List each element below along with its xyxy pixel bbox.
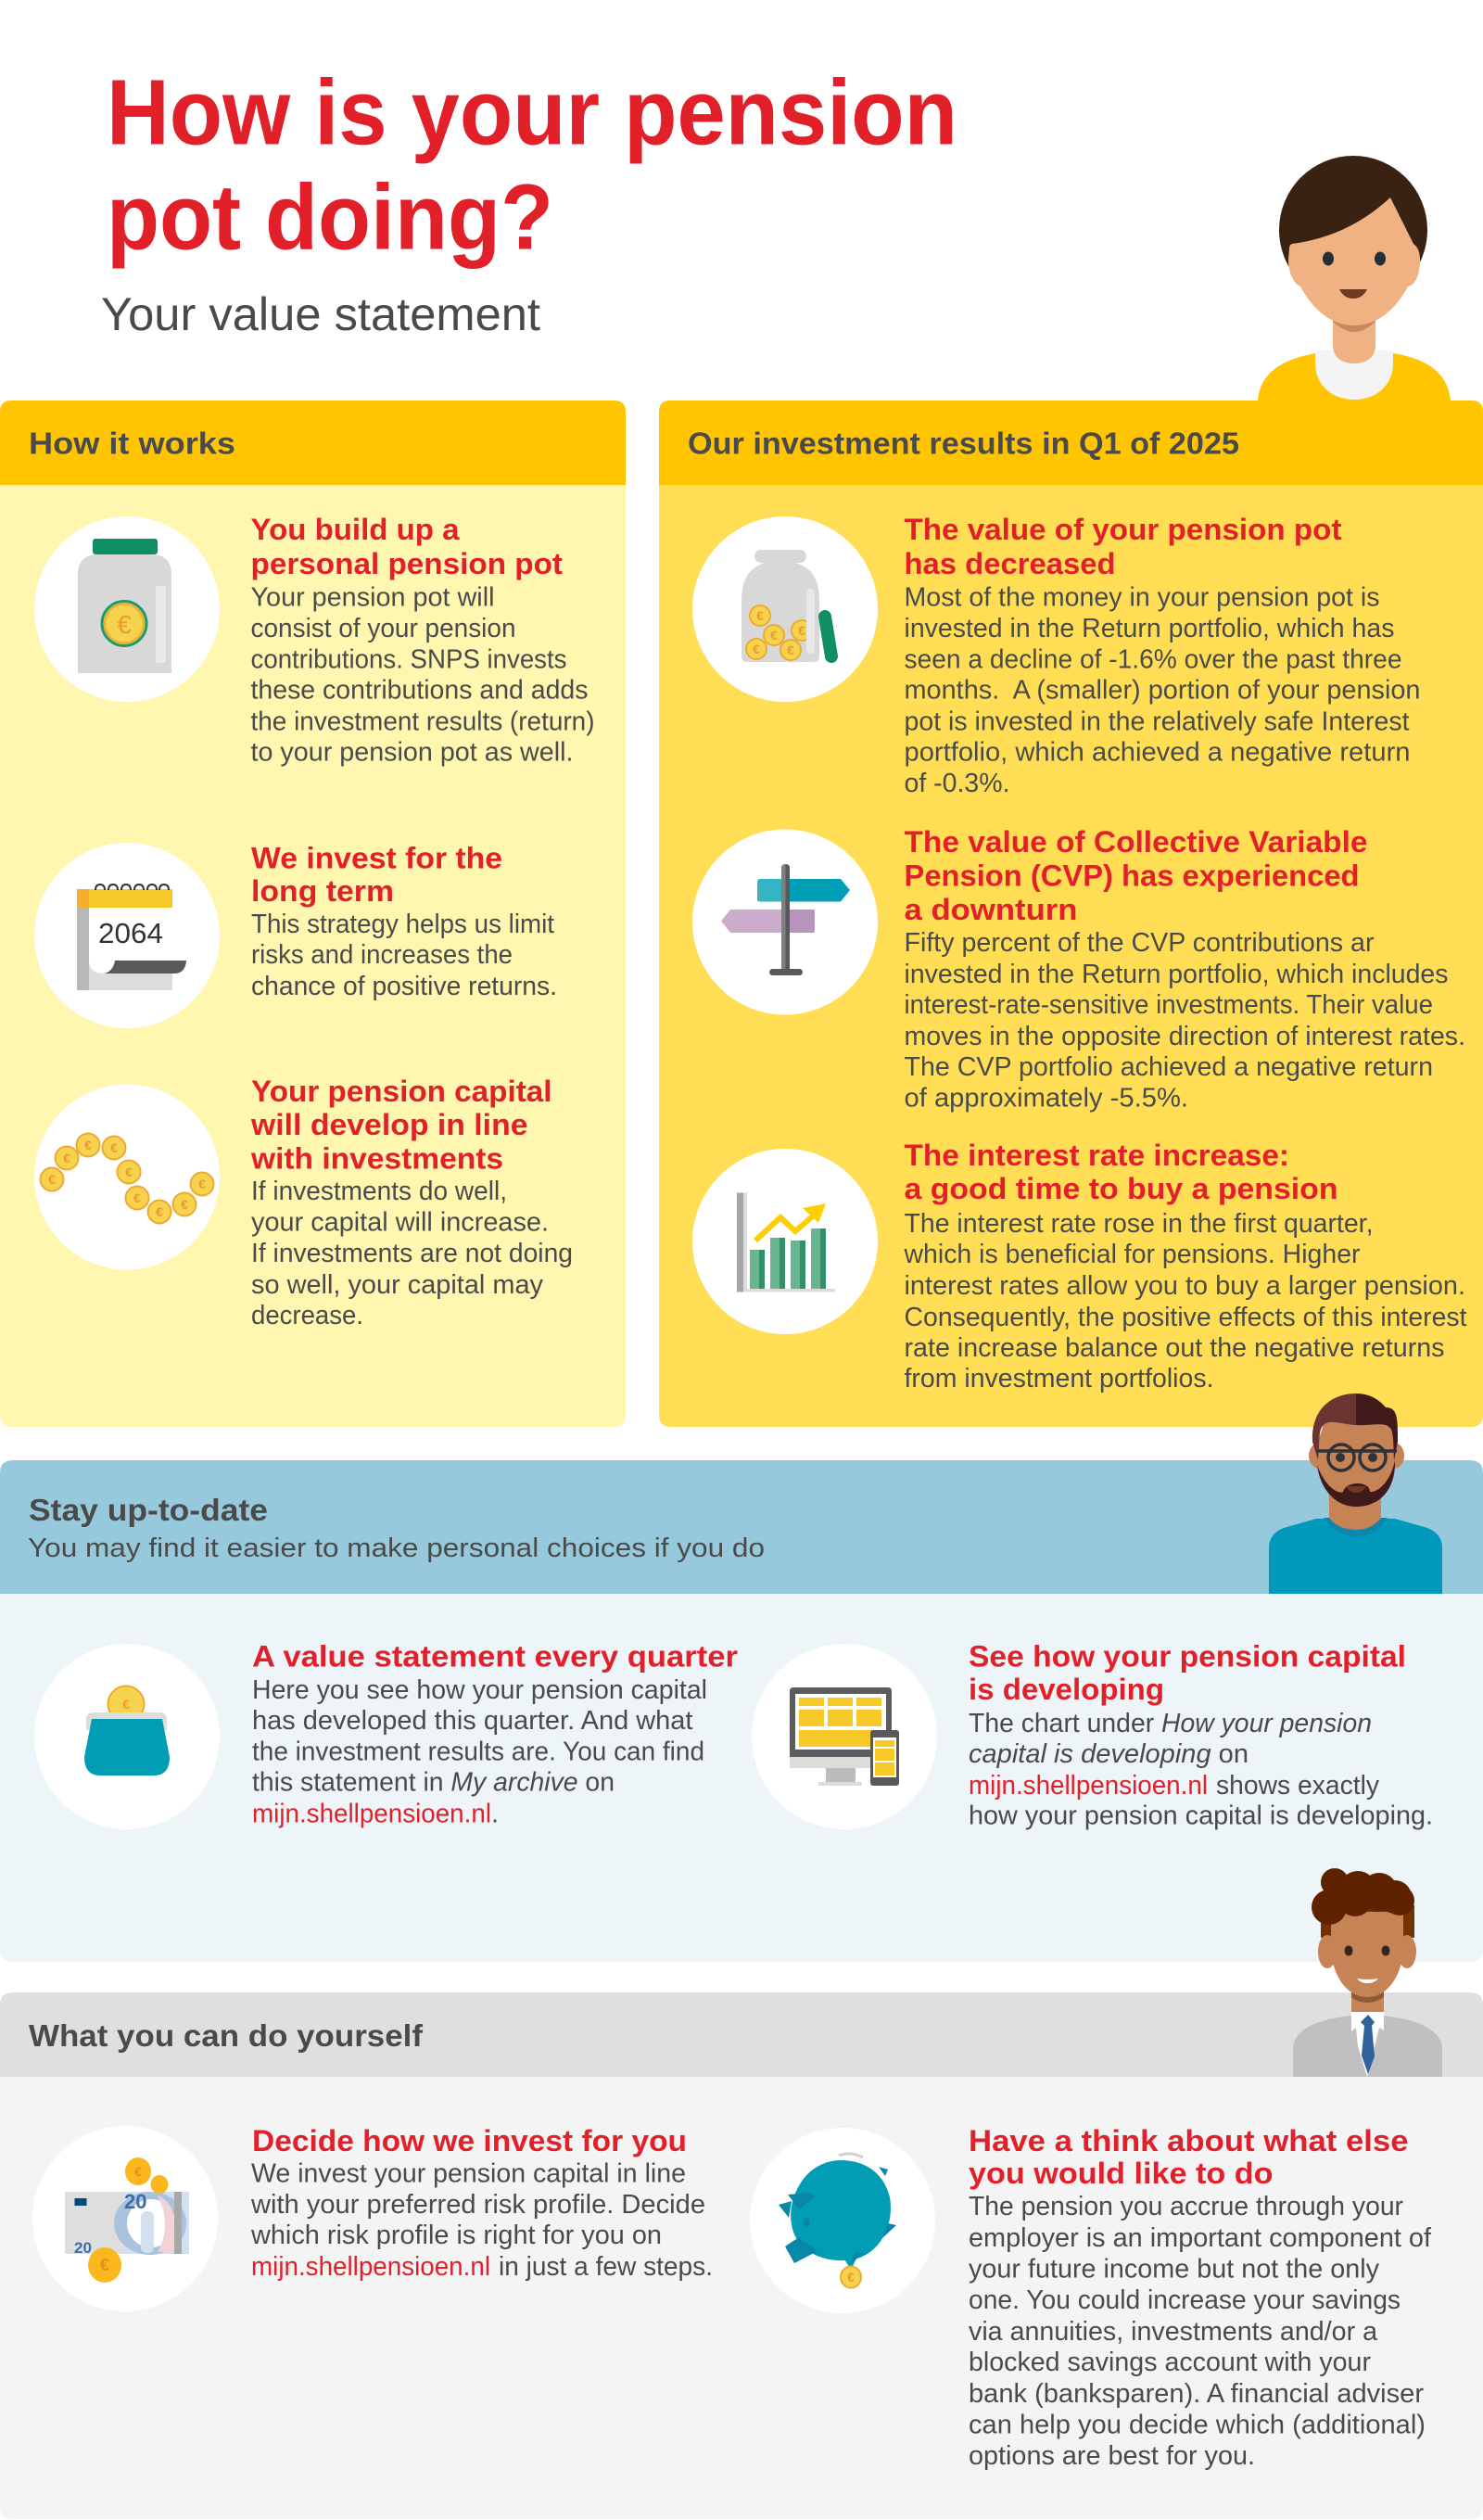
text: we invest for the long term: long term [251,874,394,908]
icon: wave of coins: € [84,1138,92,1152]
icon: open jar with coins: € [753,642,760,656]
text: see how your pension capital is developing: See how your pension capital [969,1639,1406,1673]
text: a value statement every quarter: this statement in My archive on [252,1767,615,1797]
icon: wave of coins: € [156,1204,163,1219]
text: collective variable pension downturn: of approximately -5.5%. [905,1083,1188,1113]
text: your pension capital will develop: so well, your capital may [251,1270,543,1300]
text: have a think about what else: options are best for you. [969,2441,1255,2471]
title: pot doing? [107,166,553,270]
text: decide how we invest for you [250,2124,713,2282]
text: your pension capital will develop: your capital will increase. [251,1207,549,1237]
text: have a think about what else: Have a think about what else [969,2124,1409,2157]
subheading: You may find it easier to make personal choices if you do [28,1534,765,1563]
heading: investment results: Our investment results in Q1 of 2025 [688,426,1239,460]
icon: piggy bank with coin: € [847,2270,855,2285]
icon: calendar 2064 [34,843,220,1028]
icon: jar with coin: € [117,610,132,639]
text: see how your pension capital is developing: shows exactly [1216,1771,1379,1801]
text: see how your pension capital is developing: The chart under How your pension [969,1709,1372,1738]
text: value of pension pot decreased: pot is invested in the relatively safe Interest [905,706,1409,736]
text: a value statement every quarter: . [491,1799,499,1828]
text: interest rate increase: The interest rate rose in the first quarter, [905,1209,1374,1239]
text: value of pension pot decreased: invested in the Return portfolio, which has [905,614,1394,643]
text: your pension capital will develop: If investments do well, [251,1177,507,1206]
icon: piggy bank with coin [750,2128,935,2313]
text: we invest for the long term: We invest for the [251,842,502,875]
icon: open jar with coins: € [798,623,805,638]
text: we invest for the long term: risks and increases the [251,940,513,970]
text: have a think about what else: you would like to do [969,2157,1274,2190]
text: collective variable pension downturn: The CVP portfolio achieved a negative return [905,1052,1433,1082]
text: collective variable pension downturn: a downturn [905,893,1077,926]
text: have a think about what else: your future income but not the only [969,2255,1379,2285]
text: see how your pension capital is developing: is developing [969,1673,1164,1706]
icon: purse with coin [34,1644,220,1829]
icon: desktop and phone [752,1644,937,1829]
title: How is your pension [107,61,957,165]
text: decide how we invest for you: which risk profile is right for you on [250,2221,662,2250]
text: interest rate increase: rate increase balance out the negative returns [905,1333,1444,1363]
icon: open jar with coins: € [787,643,794,657]
text: have a think about what else: one. You could increase your savings [969,2285,1401,2315]
text: see how your pension capital is developing: capital is developing on [969,1739,1249,1769]
icon: wave of coins: € [63,1151,70,1165]
text: value of pension pot decreased: The value of your pension pot [905,513,1342,546]
text: decide how we invest for you: mijn.shellpensioen.nl [251,2252,490,2282]
icon: wave of coins: € [48,1172,56,1187]
title [107,61,957,270]
icon: open jar with coins: € [756,608,764,623]
text: interest rate increase: from investment portfolios. [905,1364,1214,1394]
text: interest rate increase: which is beneficial for pensions. Higher [904,1240,1361,1269]
text: collective variable pension downturn: Pension (CVP) has experienced [905,859,1359,892]
text: a value statement every quarter: the investment results are. You can find [252,1737,704,1767]
text: you build up a personal pension pot: to your pension pot as well. [250,738,573,768]
text: your pension capital will develop [250,1075,573,1330]
text: your pension capital will develop: decrease. [251,1301,363,1330]
icon: banknote and coins: € [100,2256,109,2274]
icon: wave of coins: € [125,1165,133,1179]
text: interest rate increase [904,1139,1466,1394]
text: value of pension pot decreased: of -0.3%. [905,769,1010,798]
text: value of pension pot decreased: has decreased [905,547,1116,580]
text: collective variable pension downturn [905,825,1465,1113]
text: you build up a personal pension pot: the investment results (return) [250,706,595,736]
character: man with glasses and beard [1269,1394,1442,1594]
heading: what you can do yourself: What you can do yourself [29,2018,424,2053]
text: interest rate increase: a good time to buy a pension [905,1172,1338,1205]
text: a value statement every quarter [252,1639,738,1828]
icon: wave of coins: € [133,1190,141,1205]
text: a value statement every quarter: mijn.shellpensioen.nl [252,1799,491,1828]
panel: stay up-to-date [0,1460,1483,1962]
icon: banknote and coins: 20 [74,2239,92,2257]
panel: what you can do yourself [0,1992,1483,2519]
text: you build up a personal pension pot: personal pension pot [250,547,563,580]
text: interest rate increase: interest rates allow you to buy a larger pension. [905,1271,1465,1301]
icon: jar with coin [34,516,220,702]
icon: signpost [692,829,878,1014]
text: interest rate increase: Consequently, the positive effects of this interest [905,1303,1466,1332]
icon: banknote and coins [32,2126,218,2311]
text: collective variable pension downturn: The value of Collective Variable [905,825,1368,859]
text: collective variable pension downturn: interest-rate-sensitive investments. Their value [905,990,1433,1020]
panel: investment results [659,401,1483,1427]
text: collective variable pension downturn: invested in the Return portfolio, which includes [905,960,1448,989]
icon: wave of coins [34,1085,220,1270]
text: a value statement every quarter: Here you see how your pension capital [252,1675,707,1705]
text: your pension capital will develop: will develop in line [250,1108,528,1141]
icon: banknote and coins: 20 [124,2190,146,2213]
text: you build up a personal pension pot: consist of your pension [250,614,515,643]
text: value of pension pot decreased [905,513,1420,798]
text: value of pension pot decreased: portfolio, which achieved a negative return [905,738,1411,768]
subtitle: Your value statement [101,288,540,340]
text: value of pension pot decreased: Most of the money in your pension pot is [905,582,1379,612]
text: collective variable pension downturn: Fifty percent of the CVP contributions ar [905,928,1375,958]
text: a value statement every quarter: A value statement every quarter [252,1639,738,1673]
icon: open jar with coins [692,516,878,702]
icon: wave of coins: € [110,1140,118,1155]
icon: banknote and coins: € [134,2164,142,2179]
icon: rising bar chart [692,1149,878,1334]
text: decide how we invest for you: with your preferred risk profile. Decide [250,2190,705,2220]
text: your pension capital will develop: with investments [250,1142,503,1176]
text: we invest for the long term: This strategy helps us limit [251,910,554,939]
text: collective variable pension downturn: moves in the opposite direction of interest rates. [905,1022,1465,1051]
text: your pension capital will develop: If investments are not doing [251,1239,573,1268]
text: decide how we invest for you: in just a few steps. [499,2252,713,2282]
text: interest rate increase: The interest rate increase: [905,1139,1289,1172]
heading: how it works: How it works [29,426,235,460]
icon: wave of coins: € [181,1197,188,1212]
text: you build up a personal pension pot: these contributions and adds [250,675,588,705]
text: we invest for the long term [251,842,557,1001]
text: decide how we invest for you: Decide how we invest for you [252,2124,687,2157]
text: have a think about what else [969,2124,1432,2471]
panel: how it works [0,401,626,1427]
text: decide how we invest for you: We invest your pension capital in line [251,2158,686,2188]
text: have a think about what else: bank (banksparen). A financial adviser [969,2379,1424,2409]
text: value of pension pot decreased: months. A (smaller) portion of your pension [905,675,1420,705]
text: see how your pension capital is developing: mijn.shellpensioen.nl [969,1771,1208,1801]
text: have a think about what else: can help you decide which (additional) [969,2411,1426,2440]
text: you build up a personal pension pot: contributions. SNPS invests [250,645,567,675]
character: woman in yellow [1258,156,1451,401]
text: have a think about what else: The pension you accrue through your [969,2192,1403,2221]
icon: calendar 2064: 2064 [98,917,163,949]
icon: open jar with coins: € [770,628,778,643]
icon: wave of coins: € [198,1177,206,1191]
text: we invest for the long term: chance of positive returns. [251,972,557,1001]
text: have a think about what else: employer is an important component of [969,2223,1432,2253]
character: man in grey suit [1293,1868,1442,2077]
text: you build up a personal pension pot [250,513,595,768]
text: value of pension pot decreased: seen a decline of -1.6% over the past three [905,645,1401,675]
text: a value statement every quarter: has developed this quarter. And what [252,1706,693,1736]
text: see how your pension capital is developing [969,1639,1433,1830]
text: have a think about what else: via annuities, investments and/or a [969,2317,1378,2347]
text: you build up a personal pension pot: You build up a [250,513,460,546]
text: see how your pension capital is developing: how your pension capital is developing. [969,1801,1433,1830]
text: your pension capital will develop: Your pension capital [251,1075,552,1108]
icon: purse with coin: € [122,1697,130,1712]
text: you build up a personal pension pot: Your pension pot will [250,582,495,612]
text: have a think about what else: blocked savings account with your [969,2348,1371,2377]
heading: stay up-to-date: Stay up-to-date [29,1493,268,1527]
